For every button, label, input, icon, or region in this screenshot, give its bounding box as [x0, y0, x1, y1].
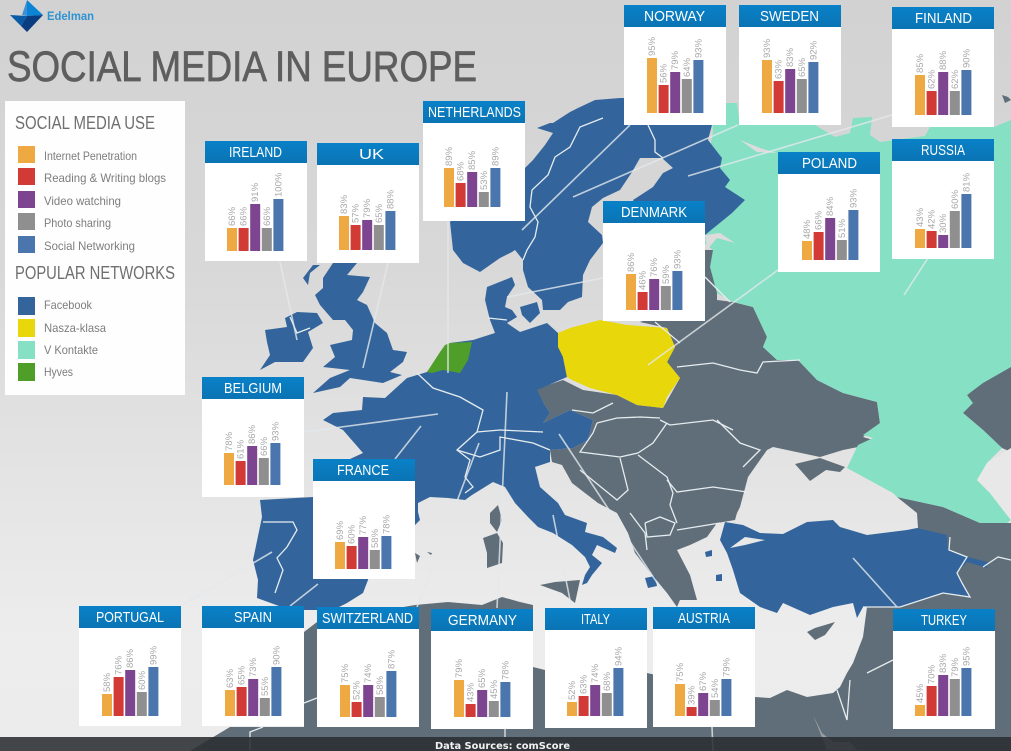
bar chart: Poland: 66%: [814, 210, 825, 230]
panel: Norway: NORWAY: [644, 8, 705, 25]
bar chart: Russia: [915, 172, 972, 248]
bar chart: Sweden: 92%: [808, 40, 819, 60]
panel: Belgium: BELGIUM: [224, 380, 282, 397]
heading: popular networks: POPULAR NETWORKS: [15, 263, 175, 283]
panel: Switzerland: SWITZERLAND: [322, 610, 413, 627]
panel: Sweden: [739, 5, 841, 125]
legend: social media use items: Reading & Writing blogs: [44, 171, 166, 185]
bar chart: Turkey: 45%: [915, 683, 926, 703]
bar chart: Poland: 51%: [837, 218, 848, 238]
bar chart: Switzerland: 74%: [363, 663, 374, 683]
panel: Sweden: SWEDEN: [760, 8, 819, 25]
panel: legend: [5, 101, 185, 395]
bar chart: Poland: 48%: [802, 219, 813, 239]
bar chart: Austria: 39%: [687, 685, 698, 705]
bar chart: UK: 88%: [385, 189, 396, 209]
bar chart: Spain: [225, 645, 282, 716]
bar chart: Netherlands: 53%: [479, 170, 490, 190]
panel: France: [313, 459, 415, 579]
bar chart: Norway: 93%: [693, 38, 704, 58]
bar chart: Italy: 94%: [613, 646, 624, 666]
legend: popular networks items: Hyves: [44, 365, 73, 379]
bar chart: Germany: 78%: [500, 660, 511, 680]
panel: Austria: [653, 607, 755, 727]
panel: Poland: [778, 152, 880, 272]
bar chart: Denmark: 76%: [649, 257, 660, 277]
bar chart: Austria: 54%: [710, 678, 721, 698]
bar chart: Finland: 90%: [961, 48, 972, 68]
bar chart: France: 58%: [370, 528, 381, 548]
bar chart: Switzerland: 75%: [340, 663, 351, 683]
bar chart: Finland: 62%: [950, 69, 961, 89]
panel: Finland: [892, 7, 994, 127]
legend: social media use items: Photo sharing: [44, 216, 111, 230]
bar chart: Ireland: 66%: [239, 206, 250, 226]
panel: Portugal: [79, 606, 181, 726]
panel: Finland: FINLAND: [915, 10, 972, 27]
bar chart: France: 69%: [335, 520, 346, 540]
bar chart: Finland: 62%: [927, 69, 938, 89]
bar chart: France: 78%: [381, 514, 392, 534]
bar chart: Denmark: [626, 249, 683, 310]
bar chart: Denmark: 46%: [638, 270, 649, 290]
bar chart: Germany: 43%: [466, 682, 477, 702]
bar chart: Italy: 52%: [567, 680, 578, 700]
bar chart: Russia: 81%: [961, 172, 972, 192]
bar chart: Spain: 55%: [260, 676, 271, 696]
bar chart: Turkey: 70%: [927, 664, 938, 684]
legend: popular networks items: Nasza-klasa: [44, 321, 106, 335]
panel: Denmark: [603, 201, 705, 321]
panel: Italy: ITALY: [581, 611, 610, 628]
bar chart: Italy: 68%: [602, 671, 613, 691]
bar chart: Finland: 88%: [938, 50, 949, 70]
bar chart: Switzerland: 87%: [386, 649, 397, 669]
bar chart: Norway: 64%: [682, 57, 693, 77]
bar chart: Germany: 45%: [489, 679, 500, 699]
bar chart: Netherlands: 85%: [467, 150, 478, 170]
panel: Russia: RUSSIA: [921, 142, 965, 159]
bar chart: Portugal: 99%: [148, 645, 159, 665]
panel: Turkey: TURKEY: [921, 612, 967, 629]
bar chart: Austria: 75%: [675, 662, 686, 682]
title: SOCIAL MEDIA IN EUROPE: [7, 43, 477, 91]
bar chart: Belgium: 66%: [259, 436, 270, 456]
panel: Germany: [431, 609, 533, 729]
bar chart: Norway: 79%: [670, 50, 681, 70]
bar chart: Belgium: 93%: [270, 421, 281, 441]
panel: Russia: [892, 139, 994, 259]
bar chart: Poland: 84%: [825, 196, 836, 216]
heading: social media use: SOCIAL MEDIA USE: [15, 113, 155, 133]
panel: Poland: POLAND: [802, 155, 857, 172]
legend: social media use items: Video watching: [44, 194, 121, 208]
bar chart: Finland: 85%: [915, 53, 926, 73]
bar chart: Germany: [454, 658, 511, 717]
map of Europe: [190, 95, 1011, 751]
bar chart: Austria: 67%: [698, 671, 709, 691]
legend: social media use items: [18, 146, 166, 253]
bar chart: Netherlands: 89%: [490, 146, 501, 166]
bar chart: UK: 65%: [374, 203, 385, 223]
panel: UK: UK: [359, 146, 384, 163]
bar chart: Sweden: [762, 38, 819, 113]
bar chart: UK: 79%: [362, 198, 373, 218]
bar chart: Norway: [647, 36, 704, 113]
bar chart: Poland: 93%: [848, 188, 859, 208]
bar chart: Belgium: 61%: [236, 439, 247, 459]
legend: social media use items: Social Networking: [44, 239, 135, 253]
bar chart: Norway: 95%: [647, 36, 658, 56]
legend: popular networks items: V Kontakte: [44, 343, 98, 357]
bar chart: Turkey: 95%: [961, 646, 972, 666]
bar chart: Russia: 43%: [915, 207, 926, 227]
bar chart: Poland: [802, 188, 859, 260]
panel: Netherlands: NETHERLANDS: [428, 104, 521, 121]
bar chart: Russia: 30%: [938, 213, 949, 233]
pointer lines: [180, 115, 928, 751]
bar chart: France: 60%: [347, 524, 358, 544]
bar chart: Italy: [567, 646, 624, 716]
bar chart: Netherlands: 68%: [456, 161, 467, 181]
bar chart: Belgium: [224, 421, 281, 485]
panel: Germany: GERMANY: [448, 612, 517, 629]
bar chart: Switzerland: 52%: [352, 680, 363, 700]
bar chart: Russia: 42%: [927, 209, 938, 229]
panel: Spain: SPAIN: [234, 609, 272, 626]
panel: Spain: [202, 606, 304, 726]
bar chart: Ireland: 91%: [250, 182, 261, 202]
bar chart: Ireland: 100%: [273, 172, 284, 197]
bar chart: Italy: 74%: [590, 663, 601, 683]
bar chart: Austria: 79%: [721, 657, 732, 677]
legend: popular networks items: Facebook: [44, 298, 93, 312]
bar chart: Switzerland: [340, 649, 397, 717]
panel: Portugal: PORTUGAL: [96, 609, 164, 626]
bar chart: Portugal: 86%: [125, 648, 136, 668]
bar chart: Sweden: 63%: [774, 59, 785, 79]
panel: Norway: [624, 5, 726, 125]
bar chart: Ireland: [227, 172, 284, 251]
bar chart: Finland: [915, 48, 972, 115]
bar chart: Netherlands: 89%: [444, 146, 455, 166]
footer bar: data sources: [0, 737, 1011, 751]
bar chart: Netherlands: [444, 146, 501, 207]
panel: Ireland: IRELAND: [229, 144, 282, 161]
panel: UK: [317, 143, 419, 263]
bar chart: Austria: [675, 657, 732, 716]
panel: Ireland: [205, 141, 307, 261]
bar chart: Norway: 56%: [659, 63, 670, 83]
bar chart: France: 77%: [358, 515, 369, 535]
bar chart: Italy: 63%: [579, 674, 590, 694]
bar chart: Portugal: 60%: [137, 670, 148, 690]
bar chart: Denmark: 93%: [672, 249, 683, 269]
bar chart: Portugal: [102, 645, 159, 716]
bar chart: Belgium: 86%: [247, 424, 258, 444]
bar chart: Spain: 90%: [271, 645, 282, 665]
bar chart: Turkey: 79%: [950, 657, 961, 677]
logo: Edelman: Edelman: [47, 9, 94, 23]
panel: Turkey: [893, 609, 995, 729]
bar chart: UK: 57%: [351, 203, 362, 223]
bar chart: Denmark: 59%: [661, 264, 672, 284]
panel: Netherlands: [423, 101, 525, 221]
legend: popular networks items: [18, 297, 106, 381]
panel: Austria: AUSTRIA: [678, 610, 730, 627]
bar chart: Denmark: 86%: [626, 252, 637, 272]
bar chart: Sweden: 83%: [785, 47, 796, 67]
legend: social media use items: Internet Penetration: [44, 149, 137, 163]
bar chart: Portugal: 58%: [102, 672, 113, 692]
bar chart: Ireland: 66%: [227, 206, 238, 226]
logo: Edelman: [10, 0, 94, 32]
panel: Italy: [545, 608, 647, 728]
bar chart: Ireland: 66%: [262, 206, 273, 226]
bar chart: Portugal: 76%: [114, 655, 125, 675]
bar chart: Switzerland: 58%: [375, 675, 386, 695]
bar chart: Sweden: 93%: [762, 38, 773, 58]
bar chart: Sweden: 65%: [797, 57, 808, 77]
panel: Belgium: [202, 377, 304, 497]
bar chart: France: [335, 514, 392, 569]
bar chart: Germany: 79%: [454, 658, 465, 678]
bar chart: Turkey: [915, 646, 972, 716]
bar chart: Spain: 65%: [237, 665, 248, 685]
bar chart: Germany: 65%: [477, 668, 488, 688]
bar chart: Spain: 73%: [248, 657, 259, 677]
bar chart: Belgium: 78%: [224, 431, 235, 451]
panel: Denmark: DENMARK: [621, 204, 687, 221]
panel: France: FRANCE: [337, 462, 389, 479]
bar chart: Russia: 60%: [950, 189, 961, 209]
bar chart: Turkey: 83%: [938, 653, 949, 673]
bar chart: UK: 83%: [339, 194, 350, 214]
bar chart: UK: [339, 189, 396, 250]
bar chart: Spain: 63%: [225, 668, 236, 688]
panel: Switzerland: [317, 607, 419, 727]
